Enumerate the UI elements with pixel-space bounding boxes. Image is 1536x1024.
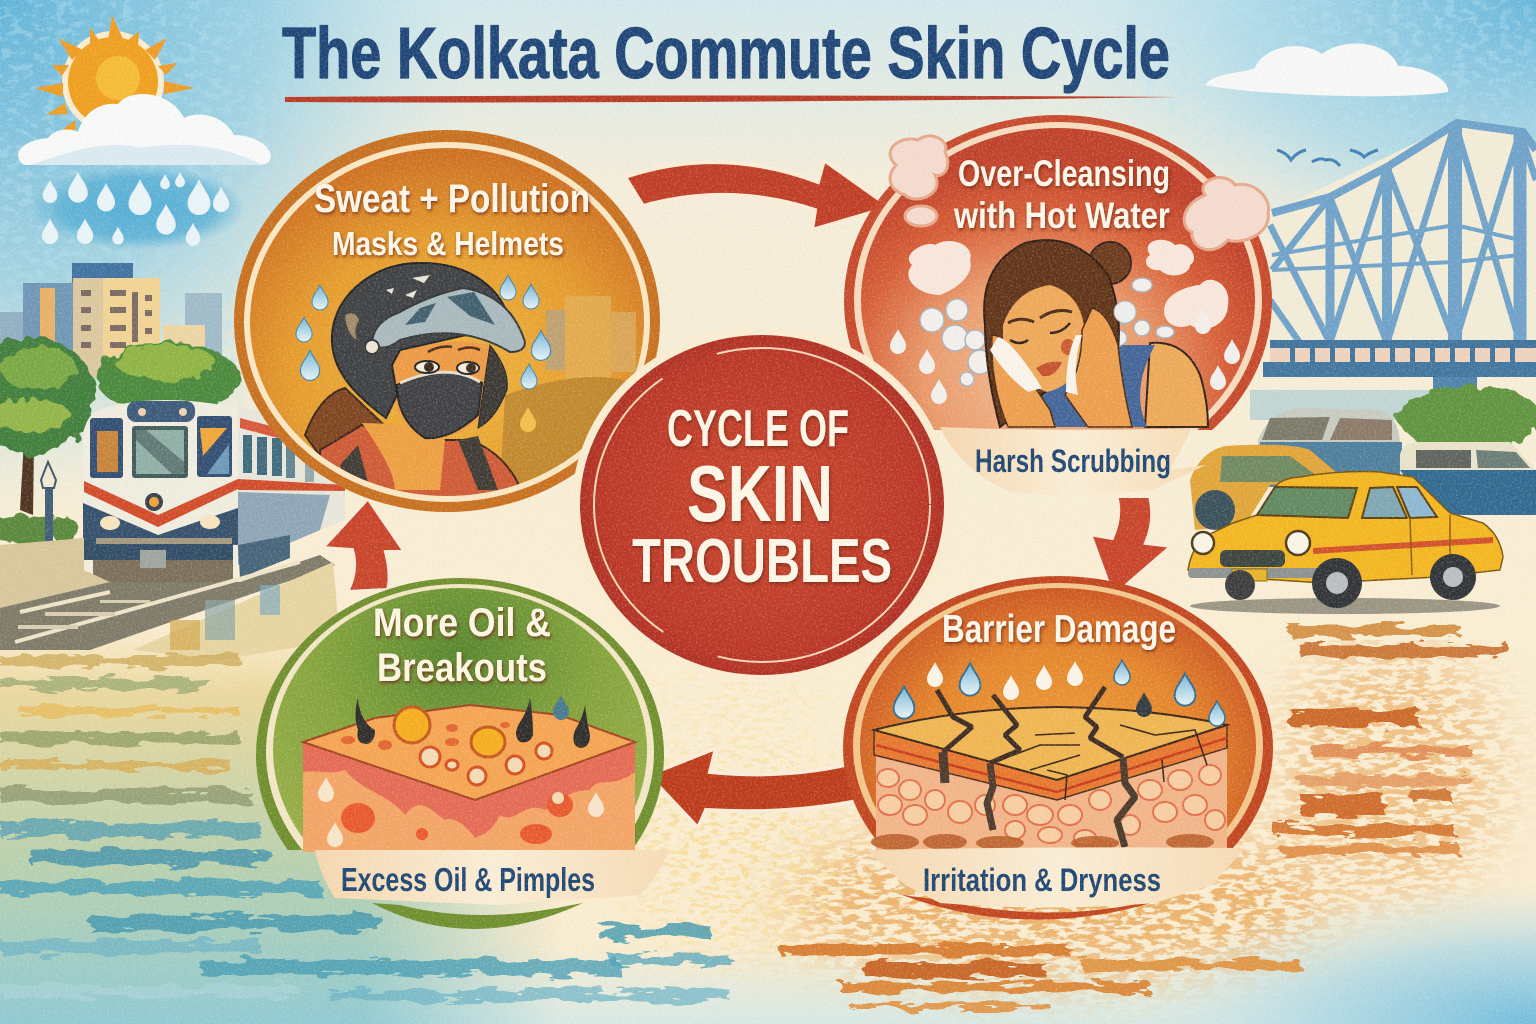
icon: foam clouds: [890, 136, 1269, 329]
water reflections right: [780, 625, 1510, 1009]
text: with hot water: with Hot Water: [953, 195, 1170, 236]
text: more oil: More Oil &: [373, 601, 551, 645]
text: sweat + pollution: Sweat + Pollution: [314, 177, 590, 221]
text: breakouts: Breakouts: [377, 646, 547, 690]
icon: cloud with rain: [18, 94, 271, 246]
text: excess oil and pimples: Excess Oil & Pimples: [341, 861, 595, 898]
icon: oily skin block: [303, 705, 635, 852]
trees and cars behind taxi: [1190, 386, 1536, 530]
icon: background buildings: [500, 296, 640, 490]
arrow: right, over-cleansing to barrier damage: [1090, 496, 1172, 597]
water reflections left: [0, 655, 730, 1001]
icon: sun: [35, 15, 195, 133]
text: troubles: TROUBLES: [632, 527, 892, 596]
text: masks and helmets: Masks & Helmets: [332, 225, 564, 262]
lamp post: [40, 462, 57, 558]
panel: over-cleansing: [844, 115, 1272, 496]
text: irritation and dryness: Irritation & Dryness: [923, 862, 1161, 898]
icon: oil drop: [520, 407, 536, 432]
railway tracks and platform: [0, 538, 340, 660]
metro train: [83, 400, 345, 582]
panel: more oil and breakouts: [256, 578, 670, 932]
arrow: top, sweat to over-cleansing: [625, 160, 890, 230]
icon: woman washing face: [984, 240, 1208, 427]
buildings left: [0, 263, 222, 378]
yellow taxi: [1188, 472, 1503, 614]
icon: soap bubbles and drops: [890, 278, 1240, 416]
text: barrier damage: Barrier Damage: [942, 608, 1176, 651]
title: The Kolkata Commute Skin Cycle: [282, 14, 1170, 94]
birds: [1277, 150, 1378, 166]
icon: oil pimples: [394, 707, 505, 757]
crescent below ribbon: [902, 882, 1210, 920]
trees left: [0, 337, 240, 544]
crescent below ribbon: [372, 903, 583, 929]
ribbon: excess oil: [315, 850, 670, 905]
icon: blue drop: [553, 695, 569, 720]
icon: skin cracks: [937, 687, 1135, 847]
panel: barrier damage: [843, 576, 1273, 920]
arrow: left, oil to sweat: [322, 498, 405, 592]
icon: blackheads: [356, 698, 590, 748]
text: cycle of: CYCLE OF: [667, 400, 849, 458]
icon: moisture drops: [894, 660, 1225, 726]
icon: dark drop: [1136, 692, 1152, 717]
icon: sweat drops: [296, 275, 551, 389]
arrow: bottom, barrier damage to oil: [648, 748, 862, 828]
title underline: [285, 96, 1178, 102]
text: skin: SKIN: [687, 449, 833, 538]
icon: small cloud right: [1205, 44, 1448, 96]
text: harsh scrubbing: Harsh Scrubbing: [975, 443, 1171, 479]
icon: commuter with helmet and mask: [305, 263, 525, 500]
ribbon: irritation and dryness: [867, 847, 1245, 908]
icon: damaged skin block: [871, 707, 1227, 850]
panel: sweat and pollution: [234, 130, 660, 512]
text: over-cleansing: Over-Cleansing: [958, 153, 1170, 194]
panel: centre cycle of skin troubles: [572, 327, 952, 683]
ribbon: harsh scrubbing: [940, 427, 1206, 496]
howrah bridge: [1263, 123, 1536, 403]
